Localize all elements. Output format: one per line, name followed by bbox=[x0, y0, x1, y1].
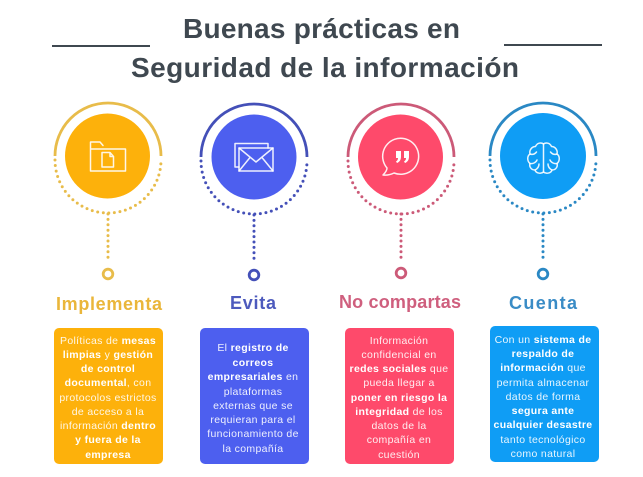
circle: yellow bbox=[65, 114, 150, 198]
card text: Cuenta: cualquier desastre bbox=[494, 419, 592, 431]
icon: envelopes bbox=[235, 144, 273, 171]
ring: yellow bbox=[55, 103, 161, 279]
card text: Implementa bbox=[59, 335, 157, 461]
card text: Implementa: limpias y gestión bbox=[63, 349, 153, 361]
card text: Evita: la compañía bbox=[223, 443, 283, 455]
icon: brain bbox=[528, 143, 559, 173]
circle: blue bbox=[212, 114, 296, 200]
column: No compartas bbox=[339, 104, 461, 464]
card text: Cuenta: datos de forma bbox=[506, 391, 580, 403]
card text: Evita bbox=[207, 342, 299, 455]
icon: folder with document bbox=[90, 142, 126, 171]
card text: No compartas: poner en riesgo la bbox=[351, 392, 447, 404]
heading: Implementa: Implementa bbox=[56, 294, 163, 314]
card: Evita bbox=[200, 328, 309, 464]
card text: Implementa: empresa bbox=[85, 449, 131, 461]
card text: No compartas: cuestión bbox=[378, 449, 420, 461]
card text: Implementa: de acceso a la bbox=[72, 406, 144, 418]
title: Buenas prácticas en bbox=[183, 13, 460, 44]
card text: No compartas bbox=[350, 335, 448, 461]
ring: sky bbox=[490, 103, 596, 279]
icon: speech bubble with quotes bbox=[383, 138, 419, 175]
circle: sky bbox=[500, 113, 586, 199]
heading: No compartas: No compartas bbox=[339, 292, 461, 312]
card text: Evita: plataformas bbox=[224, 386, 282, 398]
column: Implementa bbox=[54, 103, 163, 464]
card: Implementa bbox=[54, 328, 163, 464]
ring: blue bbox=[201, 104, 307, 280]
card text: No compartas: Información bbox=[370, 335, 428, 347]
card text: No compartas: compañía en bbox=[367, 434, 431, 446]
heading: Evita: Evita bbox=[230, 293, 277, 313]
card text: No compartas: pueda llegar a bbox=[363, 377, 435, 389]
circle: red bbox=[358, 114, 443, 200]
card text: Implementa: y fuera de la bbox=[75, 434, 141, 446]
card text: No compartas: redes sociales que bbox=[350, 363, 448, 375]
title rule: right bbox=[504, 44, 602, 46]
card: No compartas bbox=[345, 328, 454, 464]
card text: Evita: empresariales en bbox=[208, 371, 298, 383]
card text: No compartas: confidencial en bbox=[361, 349, 437, 361]
ring: pink bbox=[348, 104, 454, 278]
card text: Implementa: de control bbox=[81, 363, 135, 375]
card text: Evita: requieran para el bbox=[210, 414, 296, 426]
card text: Cuenta: Con un sistema de bbox=[495, 334, 591, 346]
card text: Evita: correos bbox=[233, 357, 273, 369]
card text: Cuenta: permita almacenar bbox=[497, 377, 590, 389]
title: Seguridad de la información bbox=[131, 52, 519, 83]
card text: Evita: El registro de bbox=[217, 342, 289, 354]
card text: Cuenta: como natural bbox=[511, 448, 575, 460]
heading: Cuenta: Cuenta bbox=[509, 293, 578, 313]
column: Evita bbox=[200, 104, 309, 464]
card text: Evita: externas que se bbox=[213, 400, 293, 412]
card text: No compartas: datos de la bbox=[371, 420, 427, 432]
title bbox=[131, 13, 519, 83]
column: Cuenta bbox=[490, 103, 599, 462]
card text: Implementa: protocolos estrictos bbox=[59, 392, 157, 404]
card text: No compartas: integridad de los bbox=[355, 406, 443, 418]
card text: Evita: funcionamiento de bbox=[207, 428, 299, 440]
card text: Implementa: información dentro bbox=[60, 420, 156, 432]
card text: Cuenta: tanto tecnológico bbox=[500, 434, 586, 446]
card text: Cuenta: información que bbox=[500, 362, 586, 374]
title rule: left bbox=[52, 45, 150, 47]
card text: Cuenta: respaldo de bbox=[512, 348, 574, 360]
card text: Cuenta bbox=[494, 334, 592, 460]
card text: Implementa: Políticas de mesas bbox=[60, 335, 156, 347]
card: Cuenta bbox=[490, 326, 599, 462]
card text: Cuenta: segura ante bbox=[512, 405, 574, 417]
card text: Implementa: documental, con bbox=[65, 377, 151, 389]
